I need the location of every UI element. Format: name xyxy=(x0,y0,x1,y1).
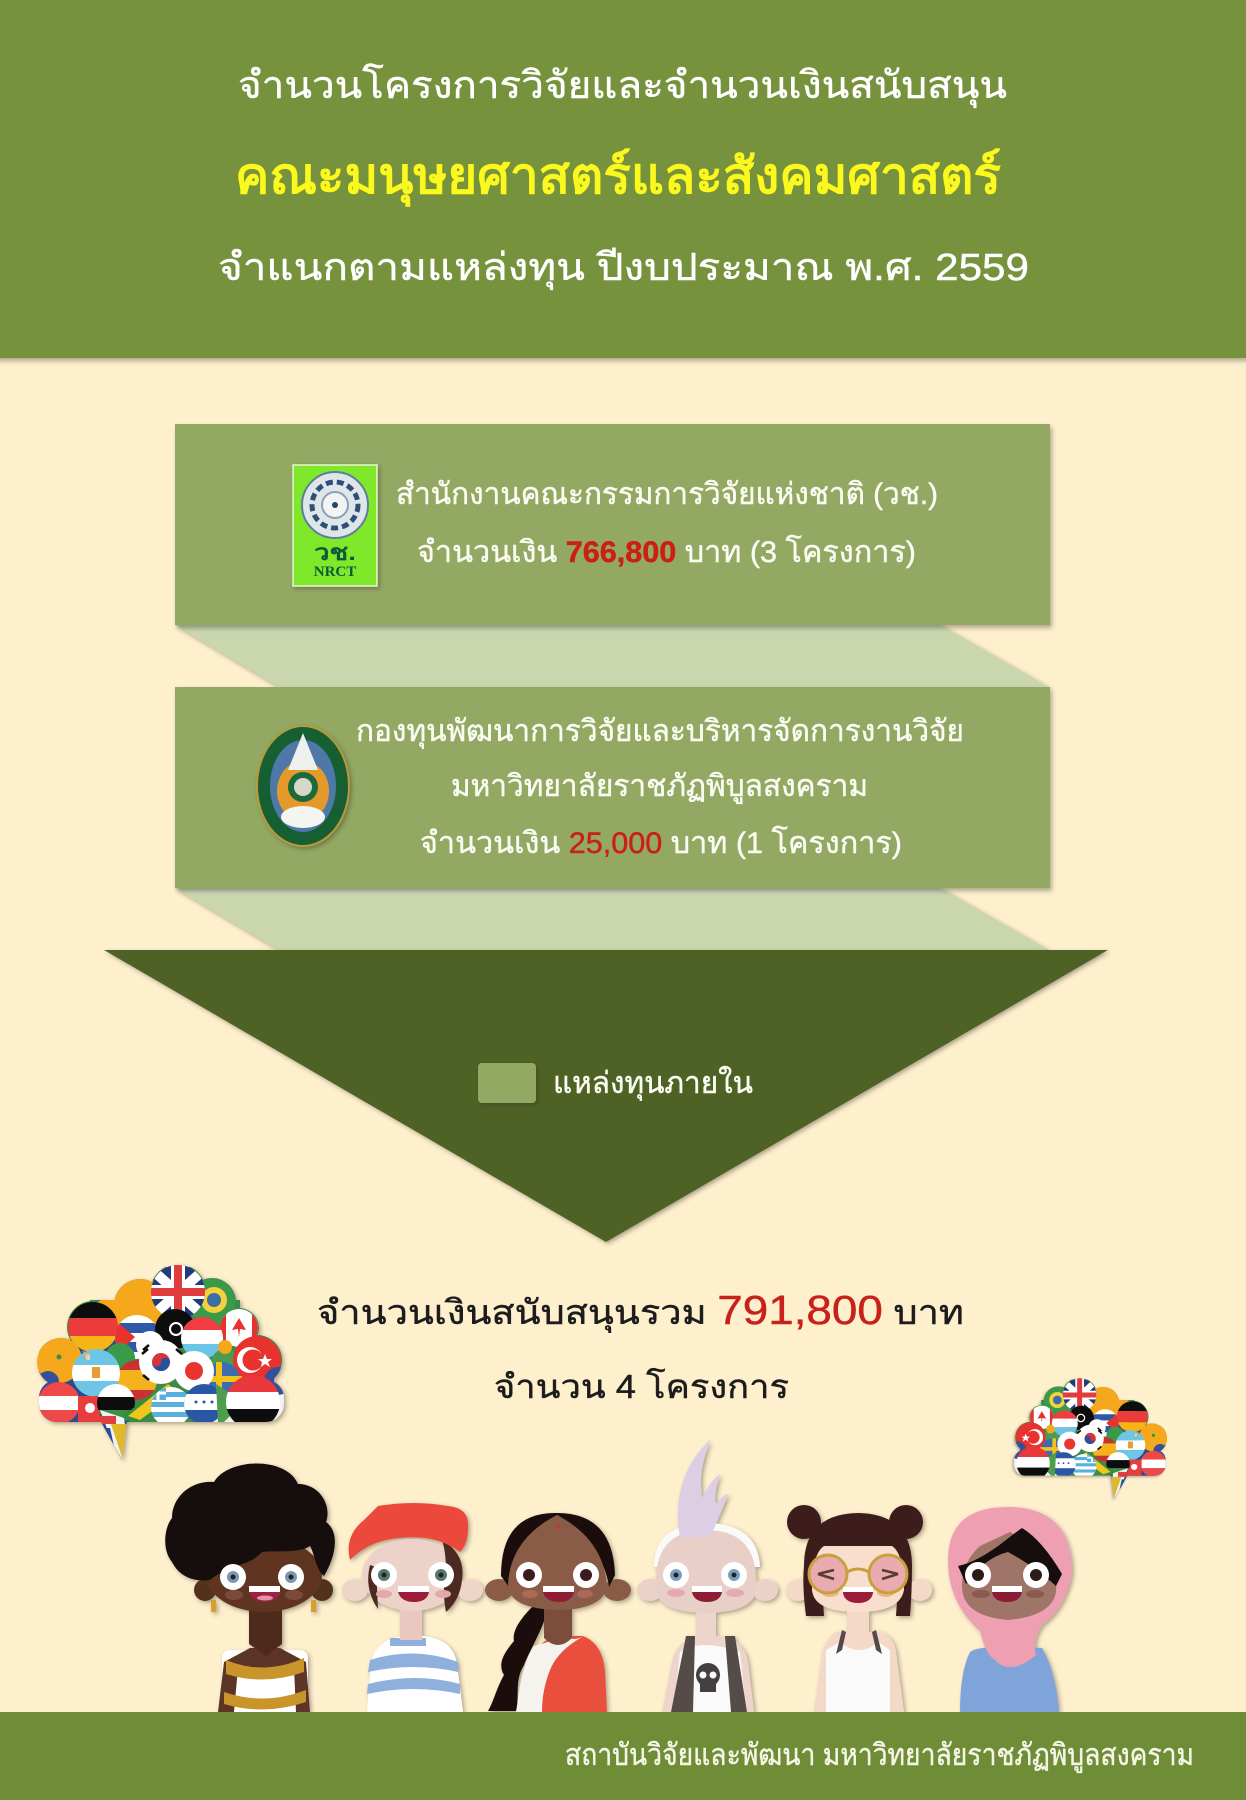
person 5: hair buns and glasses xyxy=(786,1505,932,1712)
title line 2: คณะมนุษยศาสตร์และสังคมศาสตร์ xyxy=(235,148,1001,207)
panel: university research fund xyxy=(175,687,1050,888)
icon: large flag speech cloud xyxy=(36,1264,292,1467)
icon: NRCT logo: NRCT xyxy=(314,564,356,580)
title line 3: จำแนกตามแหล่งทุน ปีงบประมาณ พ.ศ. 2559 xyxy=(218,247,1029,290)
text: NRCT amount: จำนวนเงิน 766,800 บาท (3 โครงการ) xyxy=(417,534,916,569)
person 6: pink hijab xyxy=(948,1507,1072,1712)
text: fund name line 1: กองทุนพัฒนาการวิจัยและบริหารจัดการงานวิจัย xyxy=(356,715,964,750)
person 2: red beret xyxy=(342,1503,483,1712)
person 1: curly hair xyxy=(165,1464,335,1712)
person 4: mohawk and skull shirt xyxy=(637,1440,778,1712)
legend label: แหล่งทุนภายใน xyxy=(553,1066,753,1102)
icon: NRCT logo xyxy=(293,465,377,586)
icon: university seal xyxy=(256,725,350,847)
text: fund amount: จำนวนเงิน 25,000 บาท (1 โครงการ) xyxy=(420,825,902,860)
icon: NRCT logo: วช. xyxy=(314,540,356,565)
panel: NRCT funding xyxy=(175,424,1050,625)
connector 2 xyxy=(175,888,1049,950)
connector 1 xyxy=(175,625,1049,687)
title line 1: จำนวนโครงการวิจัยและจำนวนเงินสนับสนุน xyxy=(238,63,1007,108)
footer band xyxy=(0,1712,1246,1800)
person 3: braid and red top xyxy=(485,1513,631,1712)
total projects: จำนวน 4 โครงการ xyxy=(494,1368,789,1405)
icon: small flag speech cloud xyxy=(1009,1378,1168,1504)
down arrow triangle with legend xyxy=(104,950,1108,1242)
legend swatch xyxy=(478,1063,536,1103)
total amount: จำนวนเงินสนับสนุนรวม 791,800 บาท xyxy=(317,1287,964,1333)
text: NRCT name: สำนักงานคณะกรรมการวิจัยแห่งชาติ (วช.) xyxy=(396,478,938,511)
text: fund name line 2: มหาวิทยาลัยราชภัฏพิบูลสงคราม xyxy=(451,770,868,804)
header band xyxy=(0,0,1246,358)
